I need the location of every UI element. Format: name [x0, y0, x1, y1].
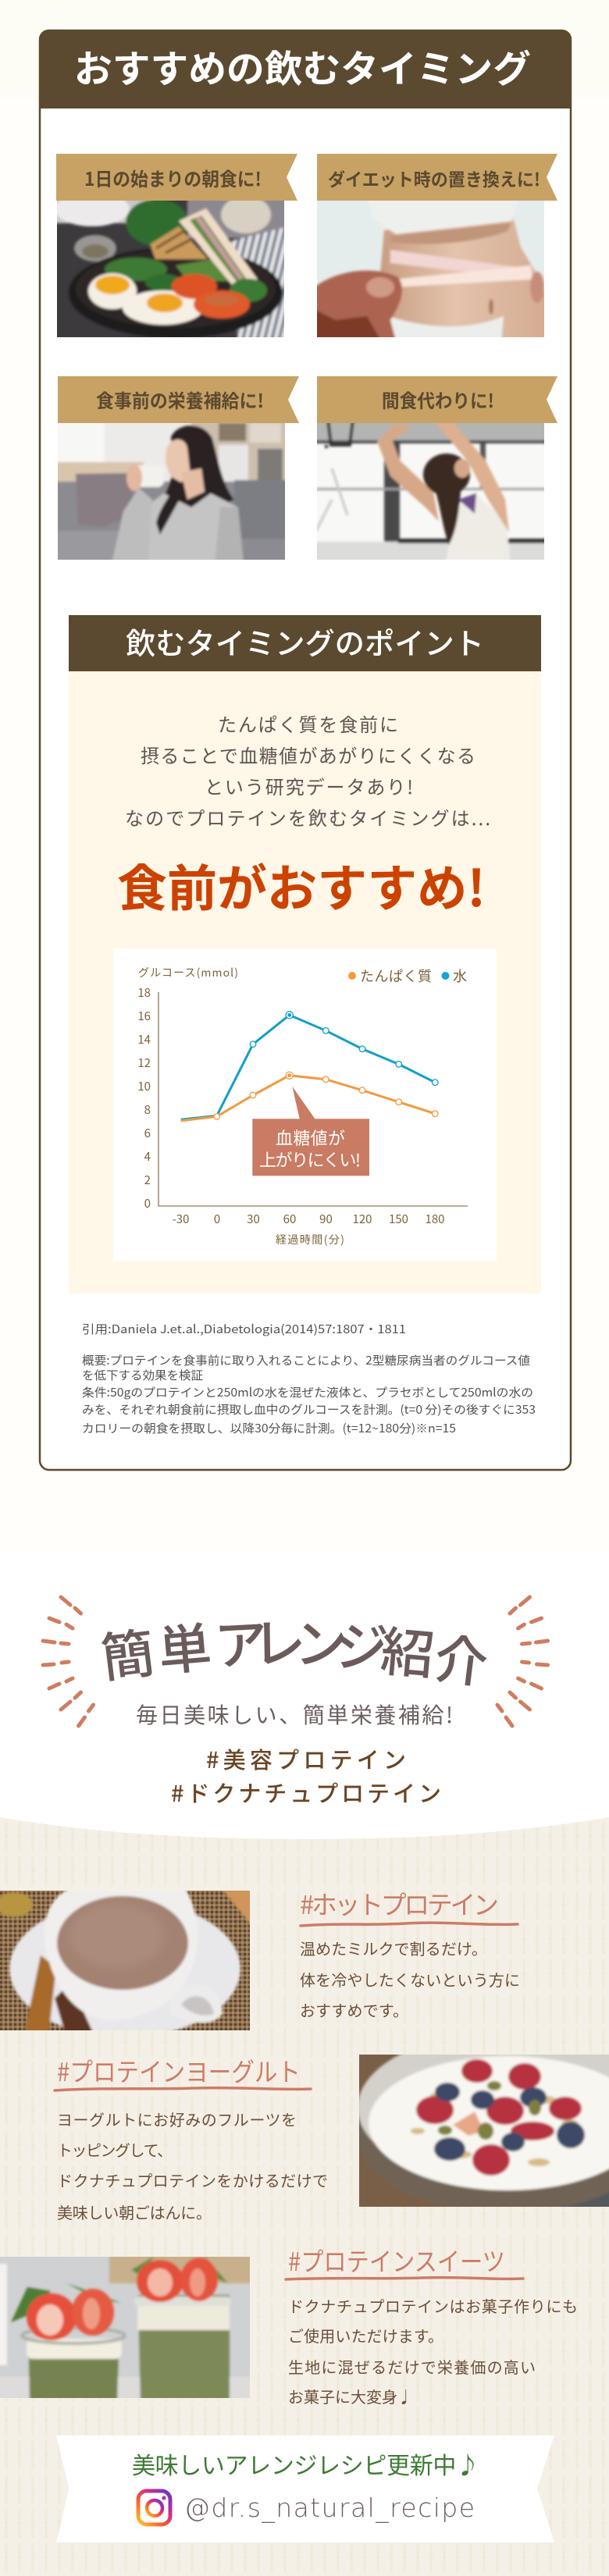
panel: recommended timing card: [39, 30, 572, 1470]
axes: [158, 992, 468, 1206]
axis titles and legend: たんぱく質: [360, 966, 432, 986]
arched title: 簡単アレンジ紹介: [96, 1600, 493, 1699]
x axis labels: 180: [426, 1211, 444, 1227]
ribbon label: [317, 376, 557, 423]
citation text: みを、それぞれ朝食前に摂取し血中のグルコースを計測。(t=0 分)その後すぐに353: [82, 1401, 536, 1418]
timing item: breakfast: [51, 154, 297, 343]
ribbon: instagram recipes: [56, 2435, 554, 2542]
explanatory text: たんぱく質を食前に: [218, 710, 398, 737]
y axis labels: 8: [144, 1101, 151, 1118]
citation text: 概要:プロテインを食事前に取り入れることにより、2型糖尿病当者のグルコース値: [82, 1352, 530, 1368]
x axis labels: 60: [283, 1211, 296, 1227]
y axis labels: 10: [137, 1078, 151, 1094]
x axis labels: -30: [173, 1211, 189, 1227]
water line: [181, 1012, 438, 1119]
recipe text: 美味しい朝ごはんに。: [57, 2201, 212, 2223]
hand-drawn underline: [286, 2278, 523, 2279]
x axis labels: 0: [214, 1211, 220, 1227]
heading bar: おすすめの飲むタイミング: [74, 38, 531, 93]
citation text: 条件:50gのプロテインと250mlの水を混ぜた液体と、プラセボとして250mlの水の: [82, 1384, 533, 1400]
recipe: protein yogurt: [55, 2031, 609, 2223]
recipe text: お菓子に大変身♩: [288, 2385, 413, 2407]
ribbon label: 間食代わりに!: [382, 386, 494, 413]
photo: waist with tape: [317, 201, 544, 337]
recipe: protein sweets: [0, 2241, 578, 2407]
x axis labels: 90: [319, 1211, 333, 1227]
ribbon label: 1日の始まりの朝食に!: [84, 164, 262, 191]
callout: hard to raise blood sugar: 血糖値が: [276, 1125, 345, 1150]
callout: hard to raise blood sugar: [252, 1087, 369, 1176]
recipe text: [57, 2108, 328, 2223]
hand-drawn underline: [301, 1923, 518, 1926]
recipe text: おすすめです。: [300, 1998, 408, 2021]
recipe text: ご使用いただけます。: [288, 2324, 443, 2347]
citation text: 引用:Daniela J.et.al.,Diabetologia(2014)57:1807・1811: [82, 1321, 406, 1337]
recipe text: 温めたミルクで割るだけ。: [300, 1937, 487, 1959]
subheading bar: [69, 615, 541, 671]
recipe text: ヨーグルトにお好みのフルーツを: [57, 2108, 297, 2130]
recipe text: ドクナチュプロテインはお菓子作りにも: [288, 2294, 578, 2317]
subtitle: 毎日美味しい、簡単栄養補給!: [136, 1699, 453, 1730]
subheading bar: 飲むタイミングのポイント: [126, 620, 484, 663]
photo: breakfast plate: [57, 201, 284, 337]
heading bar: [39, 30, 572, 109]
decorative burst left: [43, 1597, 94, 1726]
recipe text: トッピングして、: [57, 2138, 173, 2161]
recipe heading: #プロテインヨーグルト: [57, 2051, 301, 2089]
hashtags: #ドクナチュプロテイン: [171, 1776, 441, 1809]
callout: before meals recommended: 食前がおすすめ!: [117, 849, 486, 921]
callout: hard to raise blood sugar: 上がりにくい!: [259, 1147, 361, 1172]
x axis labels: 120: [353, 1211, 372, 1227]
recipe text: 生地に混ぜるだけで栄養価の高い: [288, 2355, 536, 2378]
timing item: before meals: [55, 376, 299, 564]
citation text: を低下する効果を検証: [82, 1367, 203, 1383]
recipe heading: #プロテインスイーツ: [288, 2241, 505, 2279]
ribbon label: ダイエット時の置き換えに!: [328, 165, 540, 191]
axis titles and legend: グルコース(mmol): [138, 965, 238, 980]
y axis labels: 6: [144, 1125, 151, 1141]
x axis labels: [173, 1211, 444, 1227]
y axis labels: [137, 984, 151, 1212]
y axis labels: 18: [137, 984, 151, 1001]
ribbon label: [56, 154, 297, 201]
panel: drinking timing point: [69, 615, 541, 1293]
explanatory text: [125, 710, 490, 831]
explanatory text: という研究データあり!: [205, 772, 413, 799]
hashtags: #美容プロテイン: [206, 1742, 406, 1775]
explanatory text: なのでプロテインを飲むタイミングは...: [125, 803, 490, 831]
ribbon label: [58, 376, 299, 423]
section heading: easy arrange: [43, 1597, 548, 1809]
ribbon label: [317, 154, 557, 201]
axis titles and legend: 経過時間(分): [276, 1232, 344, 1247]
photo: hot protein cup: [0, 1891, 250, 2030]
citation text: カロリーの朝食を摂取し、以降30分毎に計測。(t=12~180分)※n=15: [82, 1420, 456, 1436]
citation text: [82, 1321, 536, 1436]
photo: matcha strawberry drinks: [0, 2257, 250, 2398]
line chart: glucose: [113, 948, 497, 1261]
timing item: snack replacement: [312, 376, 557, 564]
y axis labels: 14: [137, 1031, 151, 1048]
x axis labels: 150: [389, 1211, 408, 1227]
timing item: diet replacement: [312, 154, 557, 343]
explanatory text: 摂ることで血糖値があがりにくくなる: [141, 741, 475, 768]
recipe text: [300, 1937, 520, 2021]
icon: instagram: [138, 2491, 170, 2524]
y axis labels: 12: [137, 1055, 151, 1071]
x axis labels: 30: [247, 1211, 260, 1227]
y axis labels: 4: [144, 1148, 151, 1165]
recipe text: ドクナチュプロテインをかけるだけで: [57, 2169, 328, 2191]
photo: yogurt with berries: [359, 2055, 609, 2207]
recipe text: [288, 2294, 578, 2407]
axis titles and legend: 水: [453, 966, 467, 986]
ribbon headline: 美味しいアレンジレシピ更新中♪: [132, 2446, 479, 2481]
recipe text: 体を冷やしたくないという方に: [300, 1968, 520, 1991]
y axis labels: 0: [144, 1195, 151, 1212]
recipe heading: #ホットプロテイン: [300, 1884, 499, 1922]
axis titles and legend: [138, 965, 467, 1247]
ribbon label: 食事前の栄養補給に!: [96, 386, 264, 413]
decorative burst right: [497, 1597, 548, 1726]
recipe: hot protein: [0, 1884, 520, 2037]
hand-drawn underline: [55, 2088, 311, 2090]
hashtags: [171, 1742, 441, 1809]
photo: woman stretching: [317, 423, 544, 560]
instagram handle: @dr.s_natural_recipe: [184, 2492, 475, 2524]
y axis labels: 2: [144, 1172, 151, 1188]
protein line: [181, 1072, 438, 1121]
photo: woman drinking milk: [58, 423, 285, 560]
y axis labels: 16: [137, 1008, 151, 1024]
